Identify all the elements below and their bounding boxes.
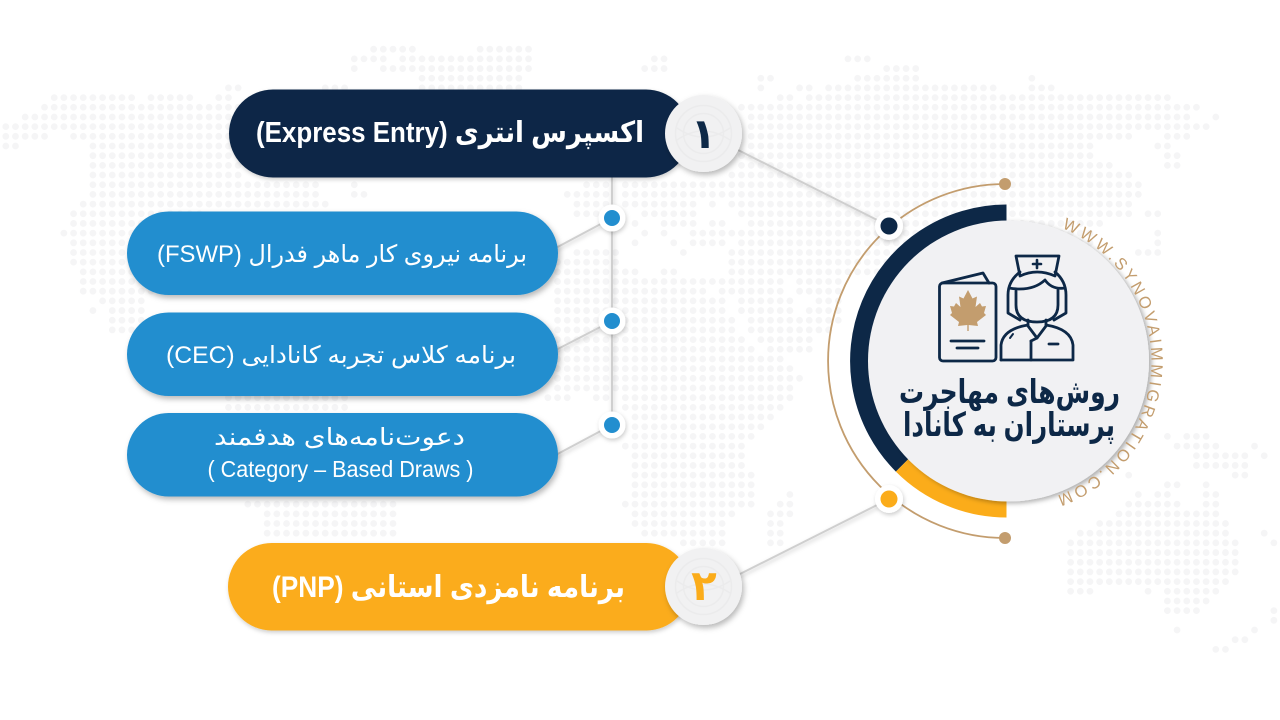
panel: PNP pill: برنامه نامزدی استانی (PNP) (272, 571, 625, 604)
icon: passport with maple leaf (940, 273, 996, 361)
connector lines (552, 150, 889, 575)
website text on curve: WWW.SYNOVAIMMIGRATION.COM (1058, 218, 1163, 506)
panel: Category-Based Draws pill: دعوت‌نامه‌های هدفمند (214, 424, 465, 451)
panel: FSWP pill: برنامه نیروی کار ماهر فدرال (FSWP) (157, 241, 527, 268)
panel: Express Entry pill (229, 90, 690, 178)
central ring and circle (828, 178, 1149, 544)
icon: maple leaf (950, 290, 986, 331)
number badge 1: ۱ (691, 110, 716, 157)
icon: nurse (1001, 256, 1073, 360)
number badge 2: ۲ (691, 562, 717, 609)
panel: Express Entry pill: اکسپرس انتری (Express Entry) (256, 117, 644, 150)
number badge 2 (665, 548, 742, 625)
navy ring segment (860, 214, 1006, 465)
title line 2: پرستاران به کانادا (903, 406, 1115, 445)
panel: Category-Based Draws pill (127, 413, 558, 496)
yellow ring segment (903, 465, 1006, 508)
panel: Category-Based Draws pill: ( Category – Based Draws ) (208, 456, 474, 482)
node: yellow dot (875, 485, 903, 513)
panel: PNP pill (228, 543, 690, 630)
node: navy dot (875, 212, 903, 240)
centre title (899, 373, 1120, 445)
panel: CEC pill: برنامه کلاس تجربه کانادایی (CEC) (166, 342, 516, 369)
panel: CEC pill (127, 312, 558, 396)
number badge 1 (665, 95, 742, 172)
panel: FSWP pill (127, 212, 558, 295)
node: blue dot 3 (598, 412, 626, 438)
node: blue dot 1 (598, 204, 626, 232)
title line 1: روش‌های مهاجرت (899, 373, 1120, 412)
node: blue dot 2 (598, 308, 626, 334)
centre disc (868, 220, 1149, 502)
tan outer arc (828, 178, 1011, 544)
